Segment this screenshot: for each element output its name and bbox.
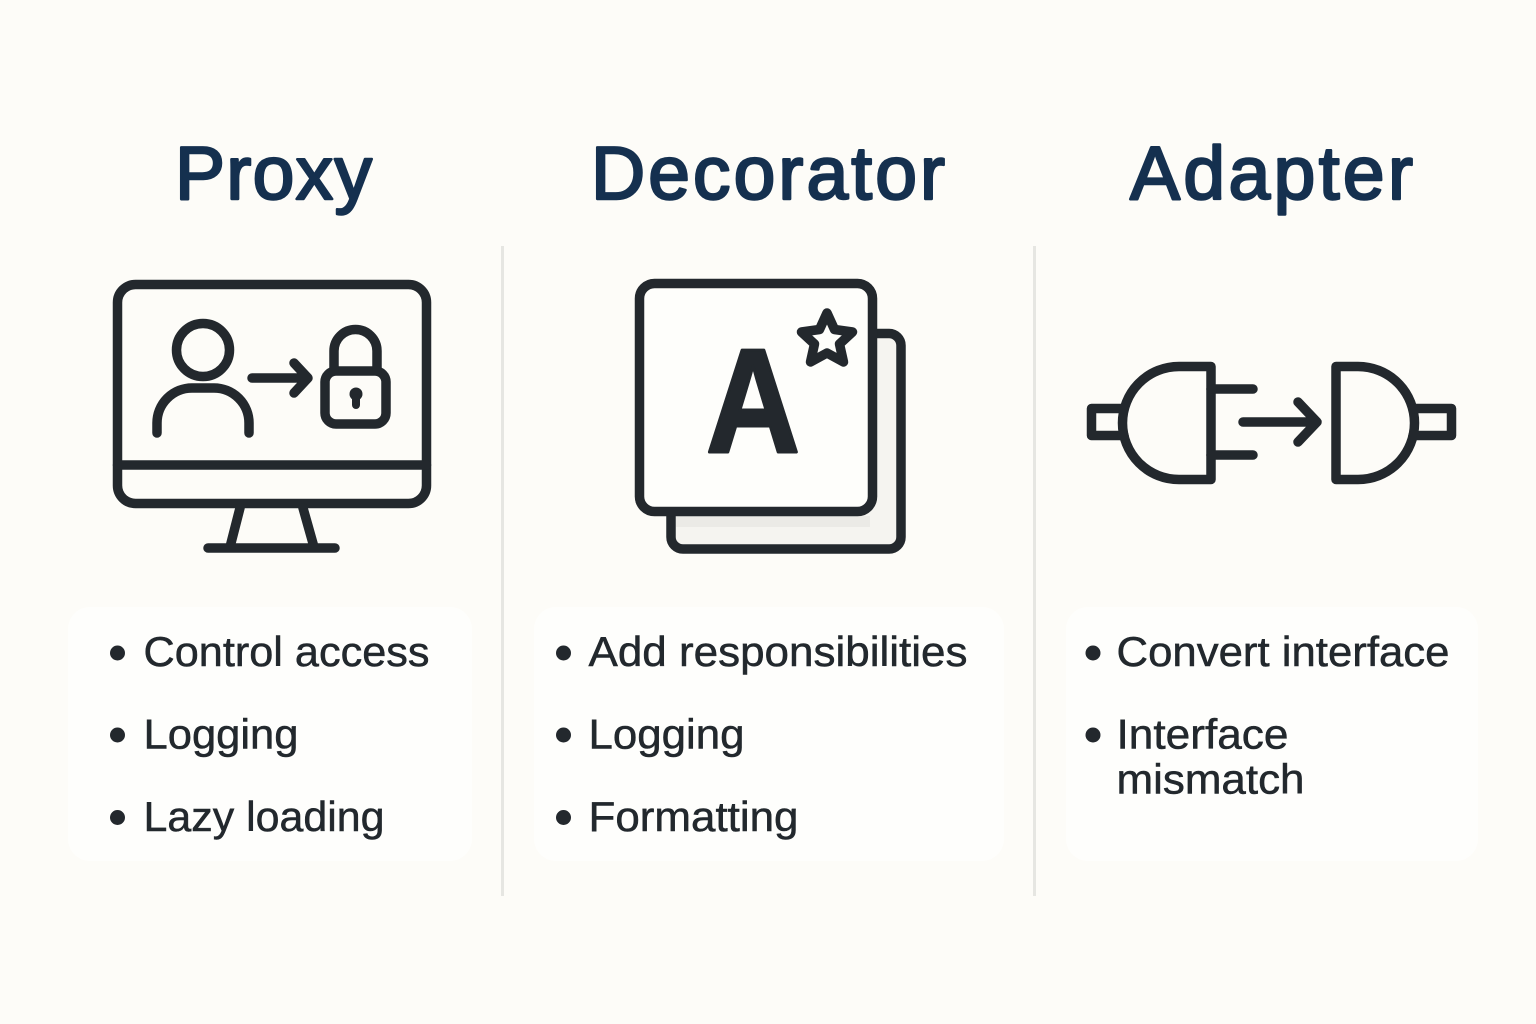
card: Decorator bullet list: Formatting [588, 793, 798, 840]
card: Adapter bullet list: Interface [1116, 710, 1288, 758]
card: Decorator bullet list [534, 607, 1004, 861]
icon: stacked cards with letter A and star [640, 284, 901, 549]
panel: Adapter [1066, 131, 1478, 861]
heading: Adapter: Adapter [1130, 131, 1413, 215]
panel: Decorator [534, 131, 1004, 861]
card: Proxy bullet list [68, 607, 472, 861]
heading: Proxy: Proxy [175, 131, 372, 215]
card: Adapter bullet list: mismatch [1116, 756, 1304, 802]
heading: Decorator: Decorator [591, 131, 945, 215]
card: Adapter bullet list: Convert interface [1116, 628, 1450, 675]
card: Proxy bullet list: Logging [144, 710, 298, 758]
icon: monitor with user, arrow and padlock [118, 284, 426, 548]
card: Decorator bullet list: Add responsibilities [588, 628, 968, 675]
card: Proxy bullet list: Lazy loading [144, 793, 384, 840]
panel: Proxy [68, 131, 472, 861]
card: Adapter bullet list [1066, 607, 1478, 861]
icon: plug, arrow and socket [1092, 366, 1452, 480]
card: Decorator bullet list: Logging [588, 710, 744, 758]
icon: stacked cards with letter A and star: A [706, 319, 800, 484]
card: Proxy bullet list: Control access [144, 628, 430, 675]
